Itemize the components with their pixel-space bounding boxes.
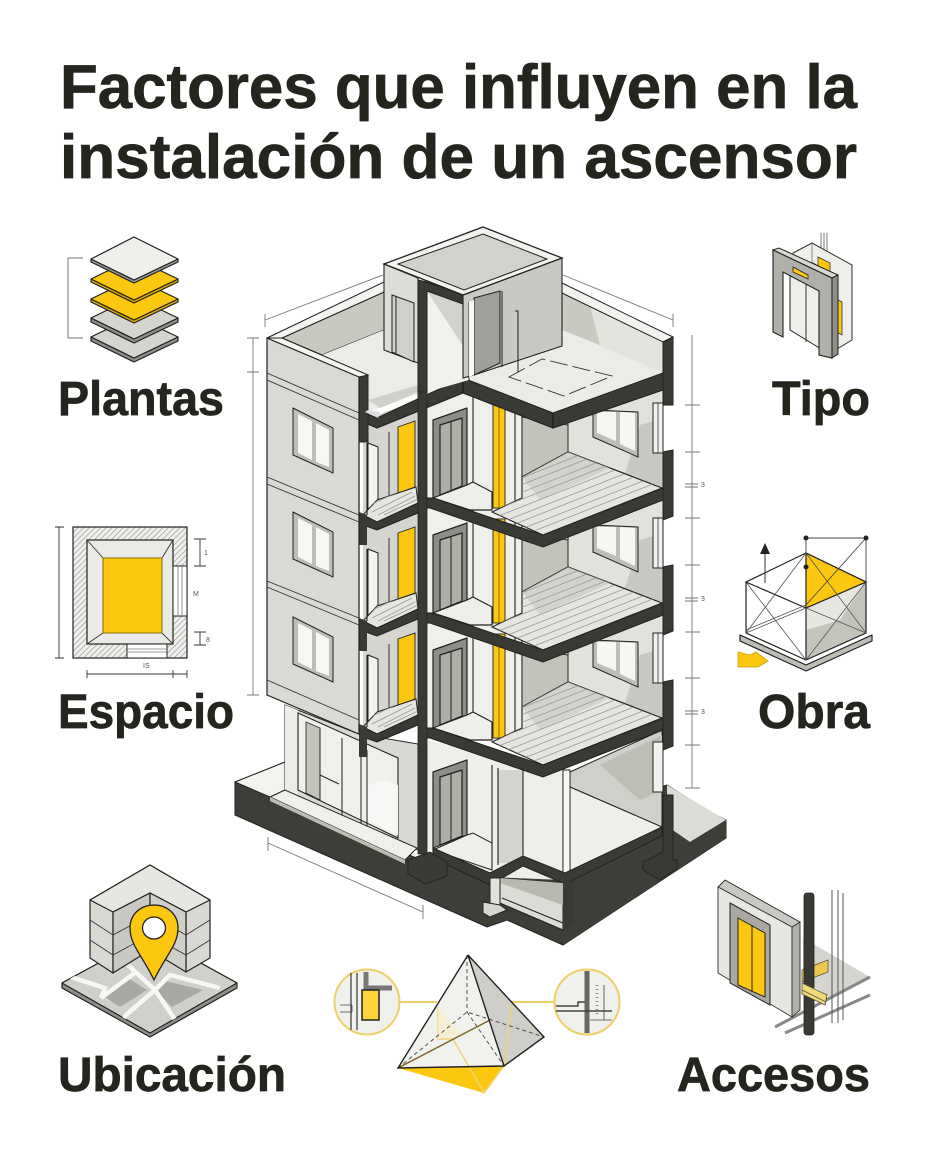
icon: shaft floor plan: M: [193, 591, 199, 598]
icon: shaft floor plan: IS: [143, 663, 150, 670]
facade window 2: [293, 512, 333, 577]
rooftop penthouse: [384, 227, 562, 395]
detail circle left: [334, 970, 400, 1034]
label: Accesos: Accesos: [677, 1049, 870, 1102]
foundation footing: [408, 852, 447, 884]
title: [60, 53, 858, 192]
icon: shaft floor plan: [55, 527, 210, 678]
label: Plantas: Plantas: [58, 373, 224, 426]
icon: elevator access door: [718, 880, 870, 1035]
detail circle right: [554, 970, 620, 1034]
icon: construction volume: [738, 536, 872, 671]
central building cutaway: [235, 227, 726, 945]
label: Tipo: Tipo: [772, 373, 870, 426]
dimension lines around building: [247, 275, 705, 919]
central load-bearing wall: [418, 392, 427, 854]
storey 1 left bay: [359, 400, 418, 545]
icon: stacked floors: [68, 237, 178, 362]
roof deck and parapets: [282, 283, 673, 442]
icon: elevator car: [773, 233, 852, 358]
dark plinth: [235, 762, 726, 945]
facade window 1: [293, 408, 333, 473]
icon: shaft floor plan: 8: [206, 637, 210, 644]
storey 2 left bay: [359, 506, 418, 651]
icon: shaft floor plan: 1: [204, 550, 208, 557]
storey 2: [427, 493, 673, 662]
elevator pit: [483, 878, 575, 930]
label: Ubicación: Ubicación: [58, 1049, 286, 1102]
title: Factores que influyen en la: [60, 53, 858, 122]
dimension lines around building: 3: [701, 709, 705, 716]
ground floor core and right room: [427, 730, 677, 885]
storey 3: [427, 608, 673, 777]
dimension lines around building: 3: [701, 482, 705, 489]
icon: structural pyramid with detail circles: [334, 955, 620, 1093]
ground floor storefront: [270, 705, 418, 864]
left facade with windows: [267, 282, 384, 734]
facade window 3: [293, 617, 333, 682]
dimension lines around building: 3: [701, 596, 705, 603]
storey 1: [427, 378, 673, 547]
icon: location pin on map: [62, 865, 237, 1037]
label: Obra: Obra: [758, 686, 870, 739]
storey 3 left bay: [359, 612, 418, 757]
title: instalación de un ascensor: [60, 123, 857, 192]
label: Espacio: Espacio: [58, 686, 234, 739]
